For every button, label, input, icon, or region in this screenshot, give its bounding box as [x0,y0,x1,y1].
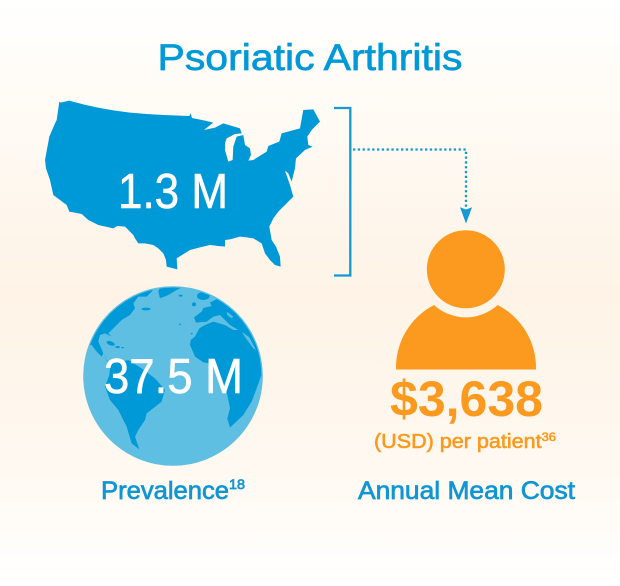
land: Central and South America [103,353,165,449]
map: United States with 1.3 M [45,101,320,269]
cost figure: $3,638 [390,371,543,427]
dotted arrow [353,150,472,224]
title: Psoriatic Arthritis [158,37,462,78]
cost unit: (USD) per patient [374,431,530,453]
globe with 37.5 M [80,285,277,466]
label: annual mean cost: Annual Mean Cost [358,477,575,505]
label: prevalence: 18 [229,476,245,492]
land: British Isles and Iceland [197,292,210,300]
land: Greenland [158,288,182,298]
icon: person [396,230,536,370]
label: prevalence: Prevalence [101,477,226,505]
bracket [334,108,350,276]
land: Caribbean islands [106,340,115,346]
label: 1.3 M: 1.3 M [118,165,228,219]
label: 37.5 M: 37.5 M [104,350,243,404]
sea: Black Sea [227,312,233,318]
sea: Red Sea [242,332,256,350]
land: Africa and Arabia [190,322,262,428]
land: Europe and Asia [194,299,259,354]
cost unit: 36 [542,430,556,444]
land: North America [90,290,153,356]
